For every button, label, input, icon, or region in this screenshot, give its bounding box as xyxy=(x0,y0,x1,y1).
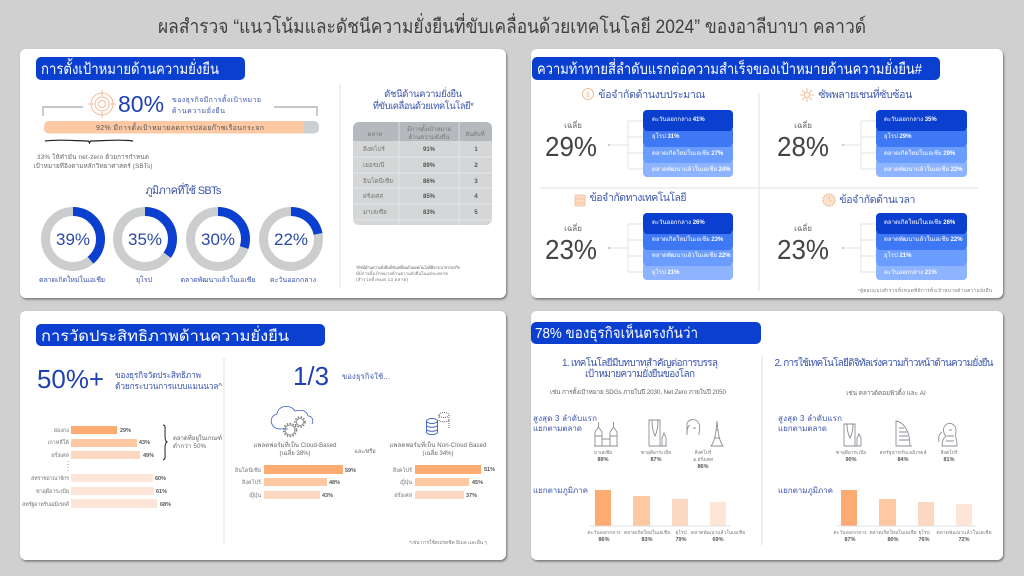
block: technology xyxy=(545,191,733,280)
chart: cloud bars: 48% xyxy=(329,480,340,486)
chart: market bars: 61% xyxy=(156,489,167,495)
block: time: ข้อจำกัดด้านเวลา xyxy=(839,194,915,206)
text: non-cloud based: แพลตฟอร์มที่เป็น Non-Cloud Based xyxy=(390,440,486,449)
table: top five markets: 3 xyxy=(474,179,478,185)
block: technology: ตะวันออกกลาง 26% xyxy=(652,219,705,226)
block: time: 23% xyxy=(777,234,829,265)
block: time: เฉลี่ย xyxy=(794,222,812,233)
stat: 50 percent plus: 50%+ xyxy=(37,364,104,394)
table: top five markets: อันดับที่ xyxy=(465,130,485,138)
chart: SBT donuts xyxy=(39,212,318,284)
column: technology role: ซาอุดีอาระเบีย xyxy=(641,449,671,456)
panel: sustainability goal setting xyxy=(20,49,506,298)
chart: cloud bars: 59% xyxy=(345,468,356,474)
footnote: challenges: *ผู้ตอบแบบสำรวจทั้งหมดที่มีการตั้งเป้าหมายด้านความยั่งยืน xyxy=(858,287,992,294)
block: supply chain xyxy=(777,87,967,177)
heading: goal setting: การตั้งเป้าหมายด้านความยั่งยืน xyxy=(41,58,219,78)
icon: clock xyxy=(823,194,835,206)
block: time: ตะวันออกกลาง 21% xyxy=(884,269,937,276)
chart: cloud bars: อินโดนีเซีย xyxy=(234,466,261,474)
text: manual measurement: ของธุรกิจวัดประสิทธิภาพ xyxy=(115,370,201,381)
icon: coin xyxy=(582,88,594,100)
text: non-cloud based xyxy=(390,440,486,457)
chart: non-cloud bars: 51% xyxy=(484,467,495,473)
footnote: index xyxy=(356,264,460,282)
block: budget xyxy=(545,88,733,177)
column: digital acceleration: 81% xyxy=(943,457,955,463)
progress bar: 92 percent: 92% มีการตั้งเป้าหมายลดการปล่อยก๊าซเรือนกระจก xyxy=(96,121,264,132)
column: technology role xyxy=(533,356,745,543)
block: technology: 23% xyxy=(545,234,597,265)
table: top five markets: 4 xyxy=(474,194,478,200)
text: cloud-based: (เฉลี่ย 38%) xyxy=(279,449,311,457)
chart: market bars: 43% xyxy=(139,440,150,446)
title: ผลสำรวจ “แนวโน้มและดัชนีความยั่งยืนที่ขับเคลื่อนด้วยเทคโนโลยี 2024” ของอาลีบาบา คลาวด์ xyxy=(158,13,866,38)
icon: server xyxy=(575,195,585,206)
heading: sustainability index: ดัชนีด้านความยั่งยืน xyxy=(384,87,463,100)
chart: regional bars one: ตะวันออกกลาง xyxy=(588,530,620,536)
block: time xyxy=(777,194,967,280)
chart: cloud bars: 43% xyxy=(322,493,333,499)
table: top five markets: มีการตั้งเป้าหมาย xyxy=(407,123,451,133)
block: supply chain: ตลาดเกิดใหม่ในเอเชีย 29% xyxy=(884,149,956,157)
chart: regional bars one: 83% xyxy=(641,537,653,543)
chart: non-cloud bars xyxy=(392,465,495,499)
heading: measuring: การวัดประสิทธิภาพด้านความยั่งยืน xyxy=(41,325,289,345)
brace xyxy=(45,140,133,143)
table: top five markets: อินโดนีเซีย xyxy=(363,177,393,185)
chart: SBT donuts: ตลาดเกิดใหม่ในเอเชีย xyxy=(39,275,105,284)
column: technology role: 89% xyxy=(597,457,609,463)
column: technology role: เป้าหมายความยั่งยืนของโลก xyxy=(585,366,695,380)
progress bar: 92 percent xyxy=(44,121,319,134)
heading: challenges: ความท้าทายสี่ลำดับแรกต่อความสำเร็จของเป้าหมายด้านความยั่งยืน# xyxy=(537,58,923,78)
chart: regional bars two xyxy=(834,490,992,543)
block: supply chain: ตะวันออกกลาง 35% xyxy=(884,116,937,123)
table: top five markets: 5 xyxy=(474,210,478,216)
chart: regional bars one: 69% xyxy=(712,537,724,543)
text: net-zero share: เป้าหมายที่อิงตามหลักวิทยาศาสตร์ (SBTs) xyxy=(34,161,152,170)
block: technology: ข้อจำกัดทางเทคโนโลยี xyxy=(590,191,687,204)
chart: SBT donuts: 22% xyxy=(274,230,308,249)
text: 80 percent description xyxy=(172,93,261,115)
column: technology role: 86% xyxy=(697,464,709,470)
icon: merlion xyxy=(939,423,957,446)
icon: coin: $ xyxy=(586,92,590,99)
text: cloud-based: แพลตฟอร์มที่เป็น Cloud-Based xyxy=(254,440,336,449)
table: top five markets: 1 xyxy=(474,147,478,153)
heading: 78 percent: 78% ของธุรกิจเห็นตรงกันว่า xyxy=(535,323,698,343)
chart: regional bars two: ตลาดพัฒนาแล้วในเอเชีย xyxy=(936,529,992,536)
heading: 78 percent xyxy=(531,322,761,344)
column: digital acceleration: 90% xyxy=(845,457,857,463)
chart: regional bars two: ตะวันออกกลาง xyxy=(834,530,866,536)
column: technology role: & ฝรั่งเศส xyxy=(693,456,713,463)
chart: market bars: 68% xyxy=(160,502,171,508)
block: time: ตลาดพัฒนาแล้วในเอเชีย 22% xyxy=(884,235,963,243)
table: top five markets: เยอรมนี xyxy=(363,161,385,169)
column: digital acceleration: 84% xyxy=(897,457,909,463)
footnote: index: (สำรวจทั้งหมด 13 ตลาด) xyxy=(356,276,409,282)
column: digital acceleration: แยกตามภูมิภาค xyxy=(778,486,833,496)
text: non-cloud based: (เฉลี่ย 34%) xyxy=(422,449,454,457)
chart: regional bars two: ตลาดเกิดใหม่ในเอเชีย xyxy=(870,529,917,536)
table: top five markets xyxy=(353,122,492,225)
chart: market bars: สหรัฐอาหรับเอมิเรตส์ xyxy=(22,501,70,508)
block: budget: ยุโรป 31% xyxy=(652,132,680,140)
chart: regional bars one xyxy=(588,490,745,543)
stat: 80 percent: 80% xyxy=(118,91,164,117)
column: technology role: มาเลเซีย xyxy=(594,449,612,456)
chart: regional bars two: ยุโรป xyxy=(918,529,930,536)
table: top five markets: 89% xyxy=(423,163,436,169)
table: top five markets: มาเลเซีย xyxy=(363,208,387,216)
chart: SBT donuts: ตลาดพัฒนาแล้วในเอเชีย xyxy=(180,275,256,284)
chart: regional bars one: 79% xyxy=(675,537,687,543)
chart: regional bars one: ยุโรป xyxy=(675,529,687,536)
chart: market bars: เกาหลีใต้ xyxy=(47,439,69,446)
table: top five markets: 91% xyxy=(423,147,436,153)
heading: measuring xyxy=(36,324,325,346)
table: top five markets: ฝรั่งเศส xyxy=(363,191,383,200)
panel: top challenges xyxy=(531,49,1003,298)
block: budget: 29% xyxy=(545,131,597,162)
block: budget: ข้อจำกัดด้านงบประมาณ xyxy=(598,89,706,101)
icon: Burj building xyxy=(896,421,912,446)
block: technology: ยุโรป 21% xyxy=(652,268,680,276)
chart: market bars: 60% xyxy=(155,476,166,482)
stat: one third: 1/3 xyxy=(293,361,329,391)
chart: regional bars two: 76% xyxy=(918,537,930,543)
block: supply chain: ตลาดพัฒนาแล้วในเอเชีย 22% xyxy=(884,165,963,173)
heading: sustainability index: ที่ขับเคลื่อนด้วยเทคโนโลยี* xyxy=(373,99,474,112)
column: digital acceleration: สูงสุด 3 ลำดับแรก xyxy=(778,414,842,424)
chart: cloud bars xyxy=(234,465,356,499)
column: technology role: สูงสุด 3 ลำดับแรก xyxy=(533,414,597,424)
text: manual measurement: ด้วยกระบวนการแบบแมนนวล^ xyxy=(115,381,222,391)
column: technology role: สิงคโปร์ xyxy=(695,449,712,456)
heading: regions using SBTs: ภูมิภาคที่ใช้ SBTs xyxy=(145,182,222,197)
table: top five markets: 85% xyxy=(423,194,436,200)
column: digital acceleration: ซาอุดีอาระเบีย xyxy=(836,449,866,456)
column: digital acceleration xyxy=(774,355,994,543)
text: 80 percent description: ด้านความยั่งยืน xyxy=(172,106,225,115)
table: top five markets: 86% xyxy=(423,179,436,185)
icon: network xyxy=(800,88,814,102)
footnote: measuring: ^เช่น การใช้สเปรดชีต อีเมล และอื่น ๆ xyxy=(409,539,487,546)
text: under 50 percent: ตลาดที่อยู่ในเกณฑ์ xyxy=(173,434,222,442)
text: manual measurement xyxy=(115,370,222,391)
chart: non-cloud bars: ฝรั่งเศส xyxy=(394,491,413,499)
chart: market bars: ซาอุดีอาระเบีย xyxy=(36,488,69,495)
block: budget: ตลาดพัฒนาแล้วในเอเชีย 24% xyxy=(652,165,731,173)
column: digital acceleration: สิงคโปร์ xyxy=(941,449,958,456)
block: technology: ตลาดเกิดใหม่ในเอเชีย 23% xyxy=(652,235,724,243)
text: under 50 percent: ต่ำกว่า 50% xyxy=(173,442,207,450)
brace: under 50 percent xyxy=(163,425,167,460)
heading: sustainability index xyxy=(373,87,474,112)
column: technology role: เช่น การตั้งเป้าหมาย SDGs ภายในปี 2030, Net Zero ภายในปี 2050 xyxy=(550,387,726,396)
column: digital acceleration: สหรัฐอาหรับเอมิเรตส์ xyxy=(880,449,927,456)
icon: merlion and Eiffel tower xyxy=(687,420,723,446)
icon: twin towers xyxy=(594,422,618,446)
text: net-zero share xyxy=(34,152,152,170)
chart: cloud bars: ญี่ปุ่น xyxy=(249,491,261,499)
block: budget: ตะวันออกกลาง 41% xyxy=(652,116,705,123)
chart: regional bars one: ตลาดพัฒนาแล้วในเอเชีย xyxy=(691,529,745,536)
block: technology: เฉลี่ย xyxy=(564,222,582,233)
column: technology role: แยกตามตลาด xyxy=(533,424,582,433)
chart: cloud bars: สิงคโปร์ xyxy=(241,478,261,486)
chart: market bars xyxy=(22,426,171,508)
chart: SBT donuts: 39% xyxy=(56,230,90,249)
table: top five markets: 2 xyxy=(474,163,478,169)
icon: cloud with gears xyxy=(271,406,313,436)
column: technology role: 87% xyxy=(650,457,662,463)
heading: challenges xyxy=(532,57,940,80)
footnote: index: *ดัชนีด้านความยั่งยืนที่ขับเคลื่อนด้วยเทคโนโลยีพิจารณาจากธุรกิจ xyxy=(356,264,460,271)
block: budget: เฉลี่ย xyxy=(564,119,582,130)
icon: target xyxy=(88,90,116,118)
block: time: ยุโรป 21% xyxy=(884,251,912,259)
text: and or: และ/หรือ xyxy=(354,448,376,455)
chart: market bars: สหราชอาณาจักร xyxy=(31,475,69,482)
chart: regional bars one: 86% xyxy=(598,537,610,543)
column: digital acceleration: เช่น คลาวด์คอมพิวติ้ง และ AI xyxy=(846,388,926,397)
text: businesses use: ของธุรกิจใช้... xyxy=(342,372,390,381)
column: digital acceleration: แยกตามตลาด xyxy=(778,424,827,433)
block: supply chain: ยุโรป 29% xyxy=(884,132,912,140)
chart: non-cloud bars: สิงคโปร์ xyxy=(392,466,412,474)
block: time: ตลาดเกิดใหม่ในเอเชีย 26% xyxy=(884,218,956,226)
chart: market bars: ฮ่องกง xyxy=(54,427,69,434)
chart: non-cloud bars: 37% xyxy=(466,493,477,499)
text: cloud-based xyxy=(254,440,336,457)
chart: regional bars two: 72% xyxy=(958,537,970,543)
block: technology: ตลาดพัฒนาแล้วในเอเชีย 22% xyxy=(652,251,731,259)
block: supply chain: 28% xyxy=(777,131,829,162)
chart: SBT donuts: 35% xyxy=(128,230,162,249)
chart: market bars: 29% xyxy=(120,428,131,434)
icon: Saudi tower xyxy=(649,420,667,446)
chart: non-cloud bars: 45% xyxy=(472,480,483,486)
column: digital acceleration: 2. การใช้เทคโนโลยีดิจิทัลเร่งความก้าวหน้าด้านความยั่งยืน xyxy=(774,355,994,369)
column: technology role: แยกตามภูมิภาค xyxy=(533,486,588,496)
chart: SBT donuts: ยุโรป xyxy=(136,275,153,284)
chart: SBT donuts: 30% xyxy=(201,230,235,249)
chart: market bars: ฝรั่งเศส xyxy=(51,451,70,459)
column: technology role: 1. เทคโนโลยีมีบทบาทสำคัญต่อการบรรลุ xyxy=(562,356,718,369)
chart: market bars: 49% xyxy=(143,453,154,459)
panel: measuring effectiveness xyxy=(20,311,506,560)
table: top five markets: ตลาด xyxy=(368,132,383,138)
block: supply chain: เฉลี่ย xyxy=(794,119,812,130)
table: top five markets: ด้านความยั่งยืน xyxy=(408,133,450,141)
chart: regional bars two: 80% xyxy=(887,537,899,543)
chart: regional bars two: 87% xyxy=(844,537,856,543)
chart: non-cloud bars: ญี่ปุ่น xyxy=(400,478,412,486)
chart: SBT donuts: ตะวันออกกลาง xyxy=(270,276,316,284)
panel: 78 percent agree xyxy=(531,311,1003,560)
icon: databases xyxy=(426,412,449,435)
text: 80 percent description: ของธุรกิจมีการตั้งเป้าหมาย xyxy=(172,93,261,104)
table: top five markets: สิงคโปร์ xyxy=(363,145,386,153)
table: top five markets: 83% xyxy=(423,210,436,216)
block: supply chain: ซัพพลายเชนที่ซับซ้อน xyxy=(818,87,912,101)
text: under 50 percent xyxy=(173,434,222,450)
icon: Saudi tower right xyxy=(844,424,861,446)
block: budget: ตลาดเกิดใหม่ในเอเชีย 27% xyxy=(652,149,724,157)
text: net-zero share: 33% ให้คำมั่น net-zero ด้วยการกำหนด xyxy=(37,152,149,161)
chart: regional bars one: ตลาดเกิดใหม่ในเอเชีย xyxy=(624,529,670,536)
footnote: index: ที่มีการตั้งเป้าหมายด้านความยั่งยืนในแต่ละตลาด xyxy=(356,270,448,276)
